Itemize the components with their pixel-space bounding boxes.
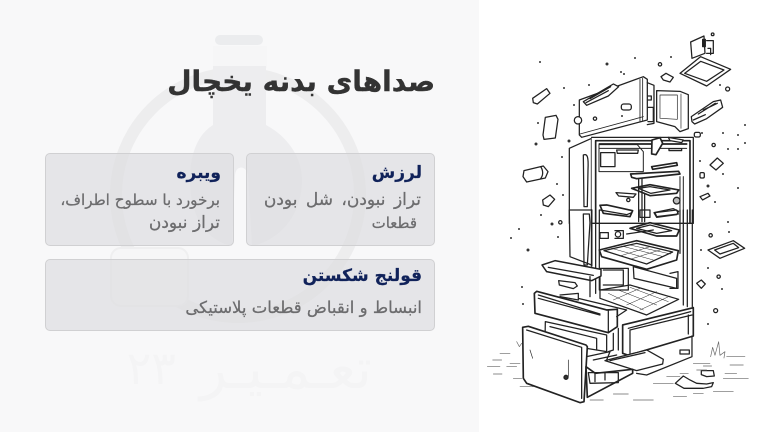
card heading: ویبره [176, 163, 221, 183]
card heading: قولنج شکستن [303, 266, 422, 286]
card text: تراز نبودن، شل بودن [264, 190, 421, 210]
upper half of fridge [523, 33, 731, 223]
fridge body [569, 138, 592, 223]
card heading: لرزش [372, 163, 422, 183]
card text: تراز نبودن [149, 213, 220, 233]
card text [60, 191, 220, 233]
grass and ground strokes [487, 342, 748, 400]
card text: انبساط و انقباض قطعات پلاستیکی [185, 298, 422, 317]
watermark logo [110, 35, 372, 402]
lower half of fridge [487, 210, 748, 403]
title: صداهای بدنه یخچال [167, 65, 435, 98]
left background panel [0, 0, 479, 432]
card text: قطعات [372, 214, 417, 232]
scattered dots [510, 56, 746, 325]
watermark logo: تعـمـیـر [197, 337, 372, 402]
illustration: exploded refrigerator [487, 32, 749, 404]
card text: برخورد با سطوح اطراف، [60, 191, 220, 209]
card: ویبره [45, 153, 234, 246]
card: لرزش [246, 153, 435, 246]
card text [264, 190, 421, 232]
watermark logo: ۲۳ [127, 341, 176, 395]
card: قولنج شکستن [45, 259, 435, 331]
